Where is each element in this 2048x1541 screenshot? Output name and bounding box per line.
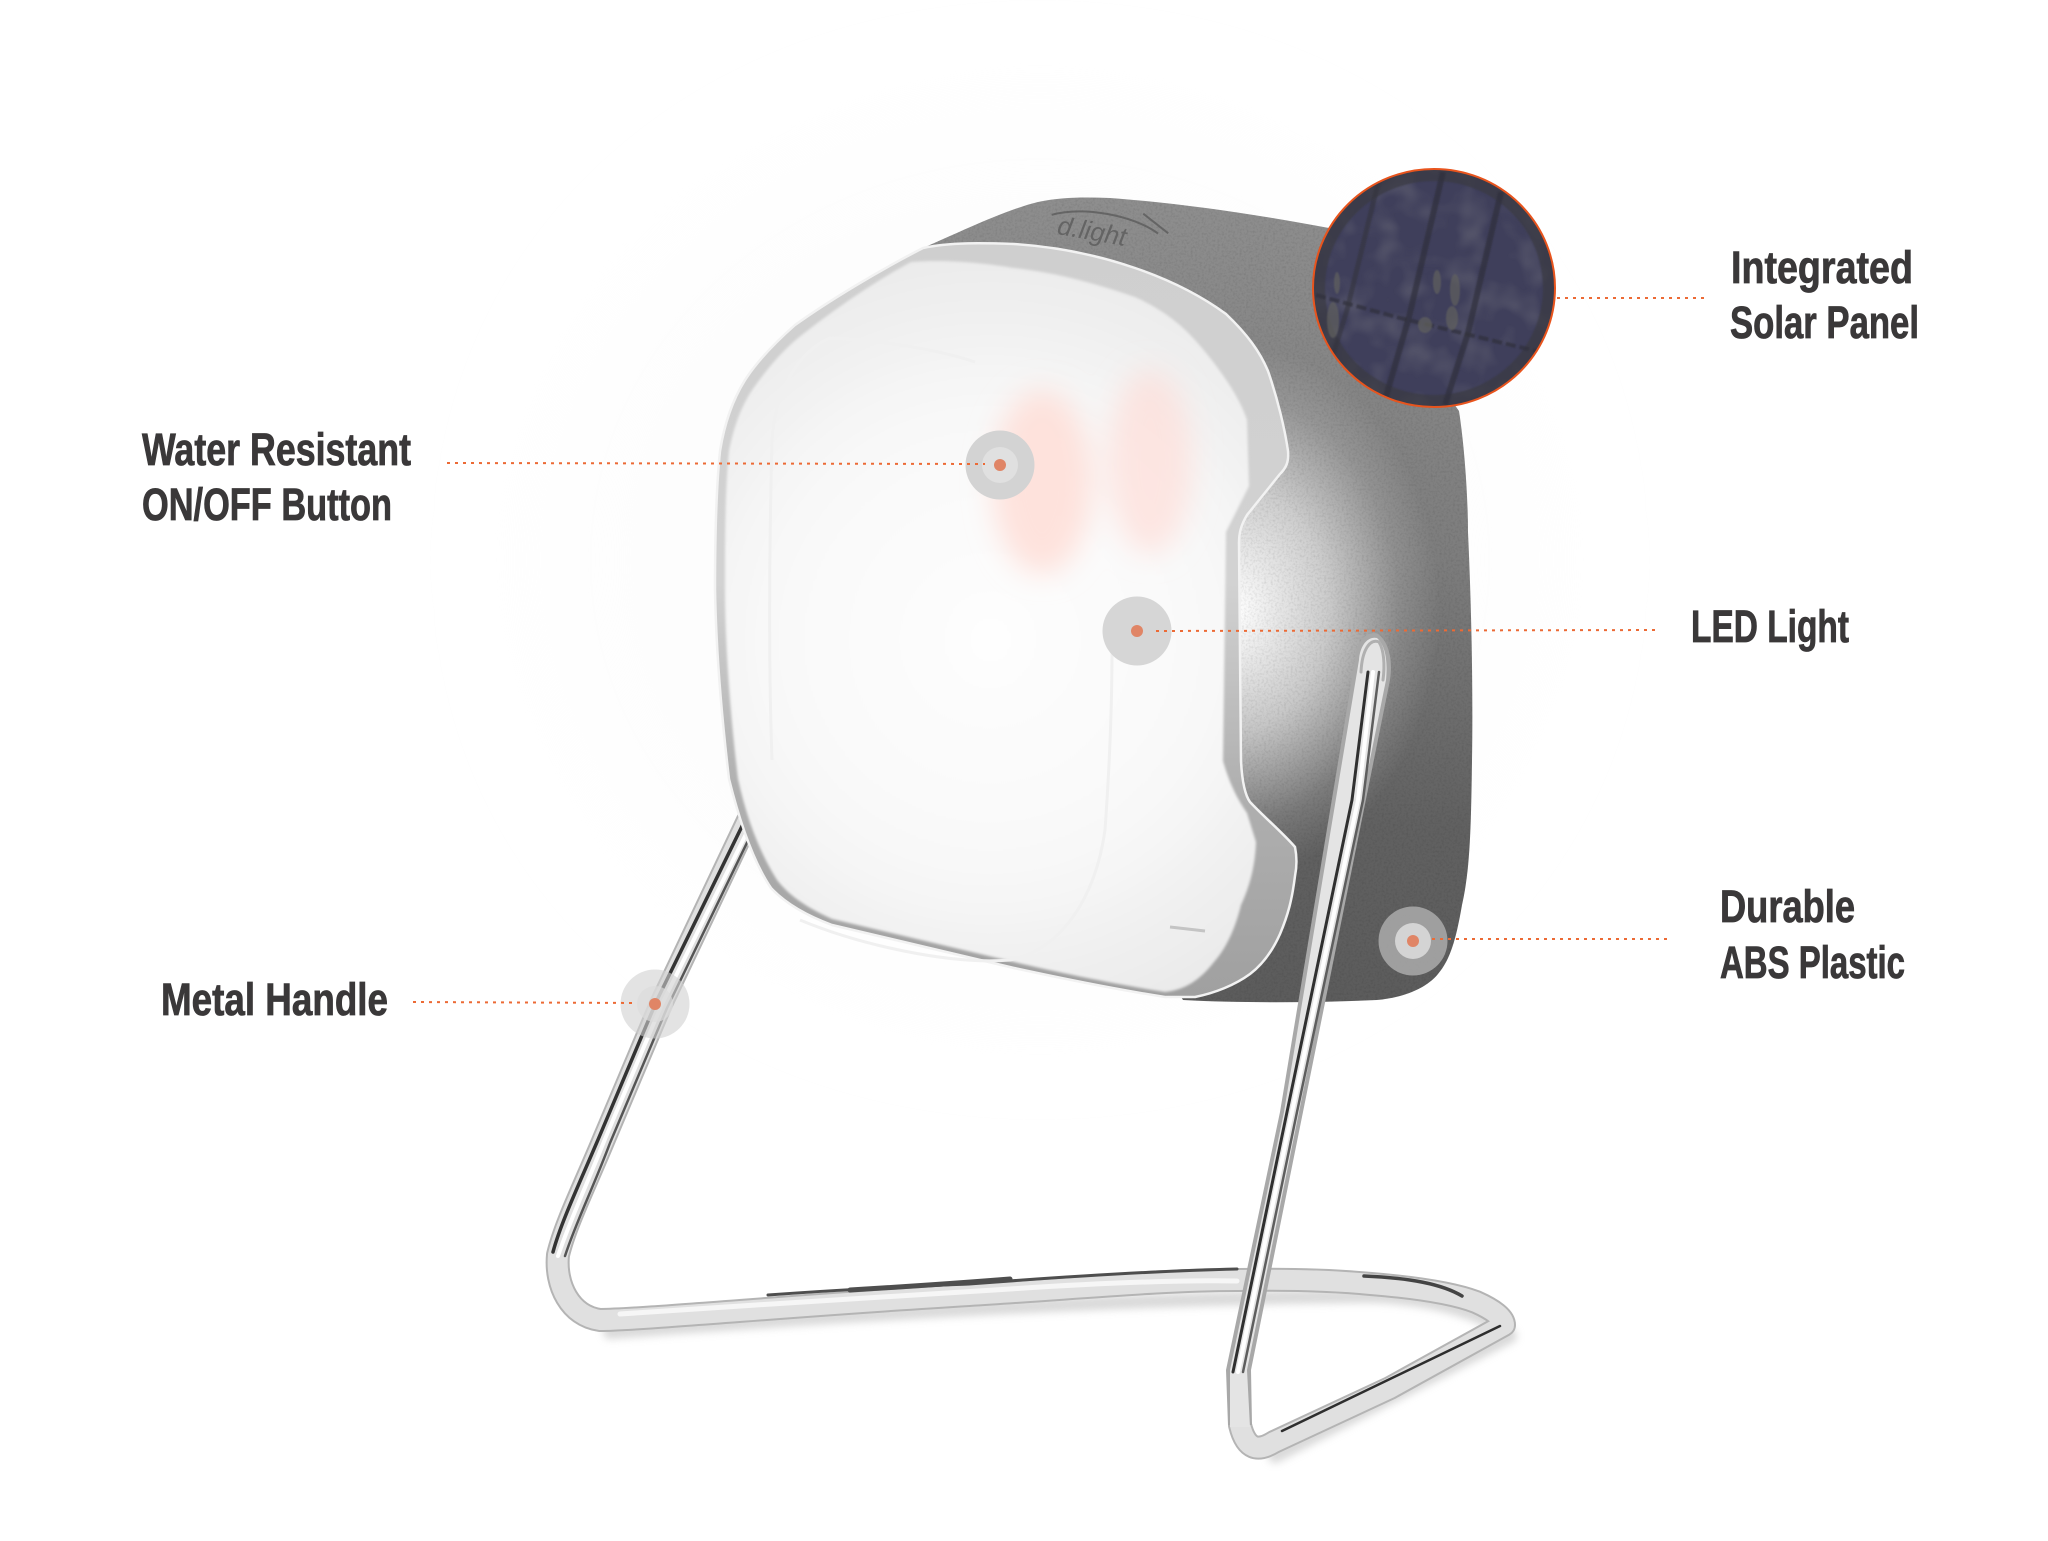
callout: Water Resistant ON/OFF Button xyxy=(142,424,1034,530)
translucent front cover rim xyxy=(715,243,1296,997)
callout: LED Light xyxy=(1102,596,1849,666)
back housing: ABS plastic xyxy=(928,198,1472,1002)
callout: Integrated Solar Panel: Integrated xyxy=(1731,242,1913,293)
callout: Durable ABS Plastic xyxy=(1378,881,1905,988)
lens xyxy=(725,261,1256,992)
callout: Durable ABS Plastic: Durable xyxy=(1720,881,1855,932)
callout: Integrated Solar Panel xyxy=(1557,242,1919,348)
base and left arm of metal stand xyxy=(553,812,1510,1456)
callout: Metal Handle xyxy=(161,970,690,1038)
callout: Integrated Solar Panel: Solar Panel xyxy=(1730,297,1919,348)
lens inner contour xyxy=(770,338,1112,961)
inner LED glow: pink reflectors xyxy=(992,370,1192,574)
right arm of metal stand xyxy=(1226,633,1391,1427)
callout: Durable ABS Plastic: ABS Plastic xyxy=(1720,937,1905,988)
callout: LED Light: LED Light xyxy=(1691,601,1849,652)
solar panel magnifier xyxy=(1310,165,1560,415)
callout: Water Resistant ON/OFF Button: ON/OFF Button xyxy=(142,479,392,530)
callout: Metal Handle: Metal Handle xyxy=(161,974,388,1025)
embossed logo xyxy=(1048,198,1171,259)
embossed logo: d.light xyxy=(1055,210,1131,252)
lamp body xyxy=(715,190,1500,1020)
callout: Water Resistant ON/OFF Button: Water Resistant xyxy=(142,424,411,475)
